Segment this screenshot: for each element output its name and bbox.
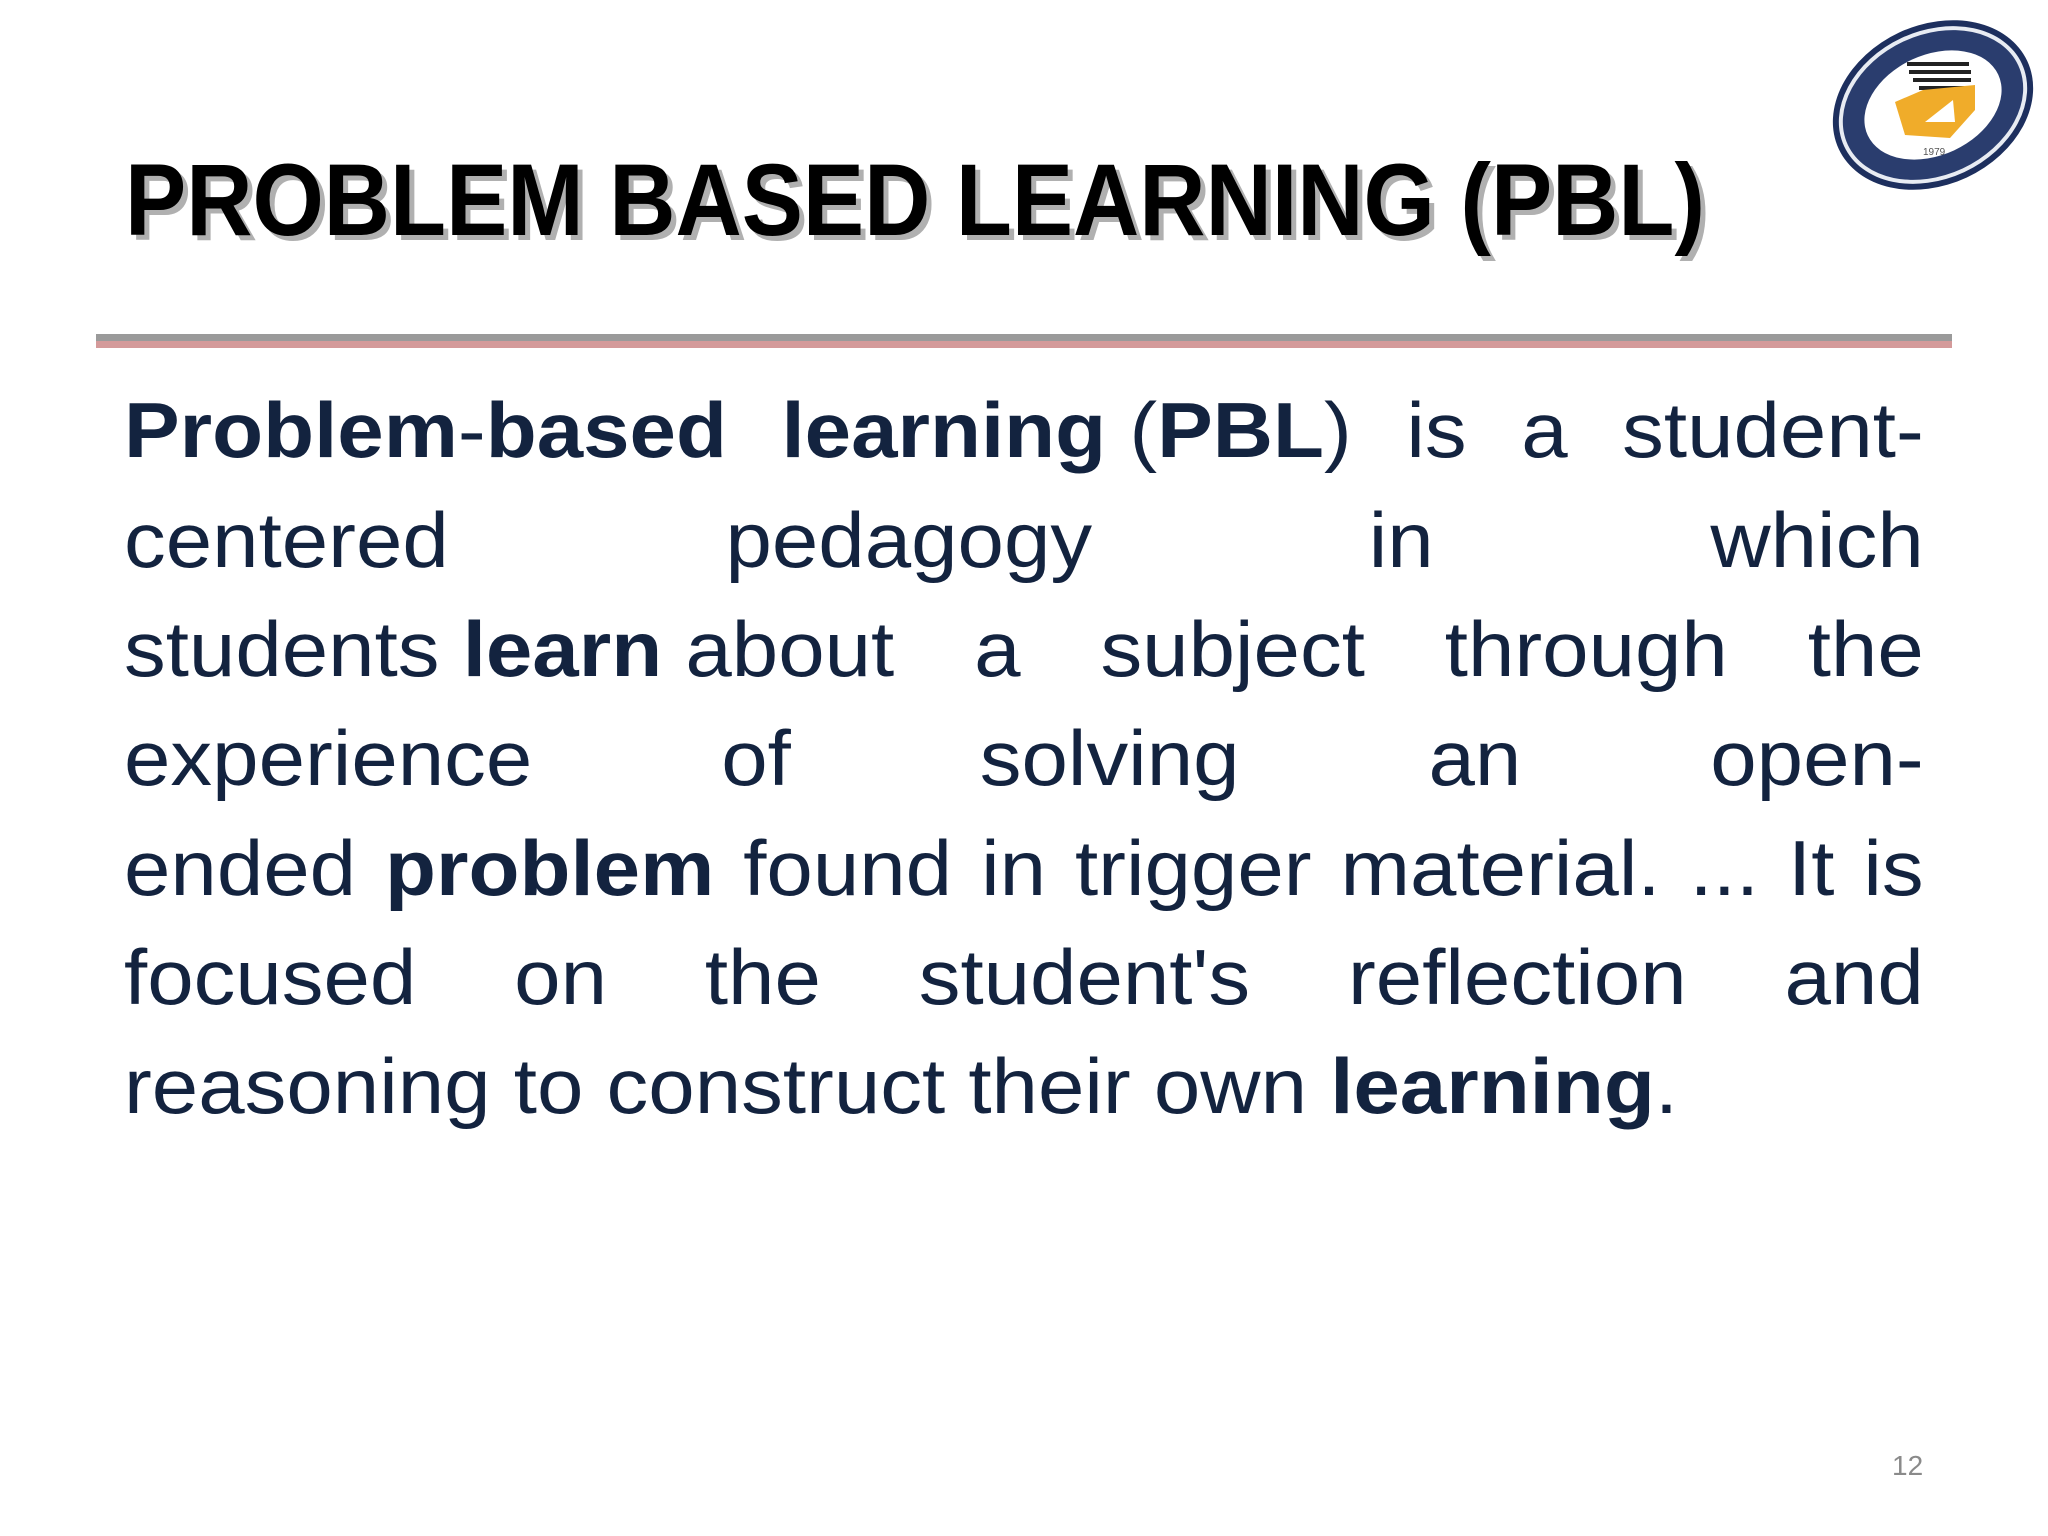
line 2: which <box>1710 496 1924 584</box>
line 3: subject <box>1100 605 1365 693</box>
line 5: trigger <box>1075 824 1312 912</box>
line 2: pedagogy <box>725 496 1092 584</box>
page number: 12 <box>1892 1450 1923 1481</box>
logo: university seal <box>1832 20 2034 190</box>
line 7: reasoning to construct their own learning. <box>124 1042 1678 1130</box>
line 4 <box>124 714 1924 802</box>
line 1 <box>124 386 1924 474</box>
line 2: centered <box>124 496 449 584</box>
line 1: a <box>1521 386 1568 474</box>
line 5: ... <box>1690 824 1759 912</box>
line 6: reflection <box>1348 933 1687 1021</box>
line 5: in <box>981 824 1046 912</box>
line 2 <box>124 496 1924 584</box>
line 5: It <box>1788 824 1834 912</box>
line 1: learning (PBL) <box>781 386 1352 474</box>
line 1: student- <box>1622 386 1924 474</box>
line 4: of <box>721 714 791 802</box>
line 3: students learn about <box>124 605 894 693</box>
line 2: in <box>1369 496 1434 584</box>
line 4: an <box>1428 714 1521 802</box>
line 6: and <box>1784 933 1924 1021</box>
line 3: the <box>1808 605 1924 693</box>
logo: university seal: 1979 <box>1923 147 1946 158</box>
line 4: solving <box>980 714 1240 802</box>
line 4: experience <box>124 714 532 802</box>
line 6: student's <box>919 933 1250 1021</box>
body paragraph <box>124 386 1924 1130</box>
line 5: is <box>1863 824 1924 912</box>
line 6: the <box>705 933 821 1021</box>
line 3 <box>124 605 1924 693</box>
line 6: on <box>514 933 607 1021</box>
line 5: material. <box>1341 824 1661 912</box>
line 4: open- <box>1710 714 1924 802</box>
line 6 <box>124 933 1924 1021</box>
line 3: a <box>974 605 1021 693</box>
line 1: is <box>1406 386 1467 474</box>
line 1: Problem-based <box>124 386 727 474</box>
line 5 <box>124 824 1924 912</box>
line 5: ended <box>124 824 356 912</box>
line 3: through <box>1445 605 1728 693</box>
line 6: focused <box>124 933 416 1021</box>
divider line <box>96 334 1952 348</box>
line 5: found <box>743 824 952 912</box>
line 5: problem <box>385 824 714 912</box>
